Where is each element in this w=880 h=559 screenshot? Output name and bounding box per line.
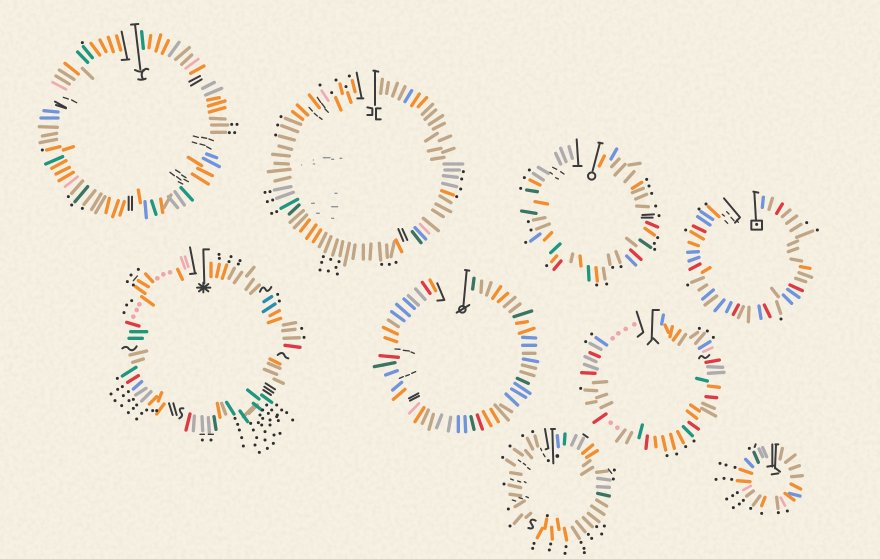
glyph: bracket and symbol [122,24,148,80]
dark green mark [214,417,216,429]
tan marks [507,436,607,538]
blue marks [386,299,538,432]
orange marks [293,81,453,252]
dark green marks [289,205,421,243]
thin dashes [550,167,564,179]
pink marks [181,257,188,268]
pink marks [322,91,429,233]
black bars [398,229,407,241]
blue marks [531,149,636,265]
grey marks [274,164,463,198]
glyph: bracket and knot [457,270,469,313]
orange marks [655,325,719,450]
pink marks [743,486,785,506]
grey marks [533,147,572,180]
orange marks [530,156,654,281]
red marks [380,282,482,429]
blue-teal marks [263,297,275,312]
glyph: bracket and fork [637,310,709,358]
black dots [111,254,304,452]
teal mark [281,199,298,208]
dark green mark [754,452,758,462]
tan marks [268,79,454,265]
red marks [554,222,658,269]
glyph: bracket and symbol [357,71,381,119]
thin dashes [722,212,738,223]
thin dashes [395,349,416,378]
black dashes [309,97,328,119]
tan marks [39,48,228,213]
dark green marks [522,190,651,247]
tan marks [747,448,802,508]
blue marks [746,459,800,496]
blue marks [405,91,426,239]
ring 5: large lower-left circle with dot fields [111,247,304,452]
tan marks [585,332,716,443]
glyph: bracket and fork [755,444,780,474]
pink mark [409,403,419,413]
pink marks [53,59,198,187]
black bars and corner [409,283,444,401]
blue marks [596,315,710,348]
thin dashes [511,448,612,501]
black dots [503,432,614,553]
tan marks [692,198,813,322]
dark green marks [374,278,532,429]
glyph: bracket and square [724,192,762,230]
red marks [690,204,802,317]
ring 6: large centre circle [374,270,538,432]
ring 1: large top-left circle [39,24,237,218]
glyph: bracket and circle [573,139,603,180]
blue marks [41,111,219,218]
black dots [42,43,237,208]
teal marks [551,244,589,280]
grey marks [584,343,724,373]
thin dashes [133,276,213,434]
tan marks [130,267,299,417]
ring 7: medium lower-centre-right circle [581,310,724,456]
black bars and dashes [642,214,654,218]
pink dots [133,272,170,317]
orange marks [537,445,597,540]
orange marks [737,469,801,506]
ring 4: medium far-right circle [686,192,817,322]
black dots [521,170,659,285]
orange marks [136,263,281,417]
blue marks [688,197,799,318]
ring 3: medium centre-right circle [521,139,659,285]
grey marks [168,42,222,208]
grey marks [759,448,767,457]
orange marks [47,35,225,217]
black bars and wave signs [122,287,288,418]
tan marks [533,159,648,279]
thin dashes [63,97,213,184]
teal mark [559,434,570,444]
black dots [686,204,817,319]
black bars and dashes [55,76,202,210]
pink mark [703,348,712,352]
red marks [127,322,300,430]
dark green mark [75,187,88,202]
grey marks [136,388,209,432]
grey marks [408,289,451,431]
orange marks [689,207,810,272]
dark green mark [598,493,609,496]
black dots [581,328,713,456]
blue mark [557,436,558,447]
ink speckles [302,158,342,218]
tan marks [388,281,536,429]
black dots [716,448,787,513]
black dots [265,76,463,274]
glyph: bracket and asterisk [190,247,210,292]
ring 9: small bottom-right circle [716,444,802,513]
teal marks [46,32,192,214]
pink dots [611,324,634,428]
grey marks [572,436,610,487]
blue mark [133,382,142,389]
orange marks [383,280,534,426]
ring 2: large centre-top circle [265,71,463,274]
teal marks [122,332,272,422]
teal marks [639,378,707,438]
ring 8: small bottom-centre circle [503,429,614,553]
red marks [582,353,719,448]
glyph: bracket, dot and S sign [528,429,588,528]
